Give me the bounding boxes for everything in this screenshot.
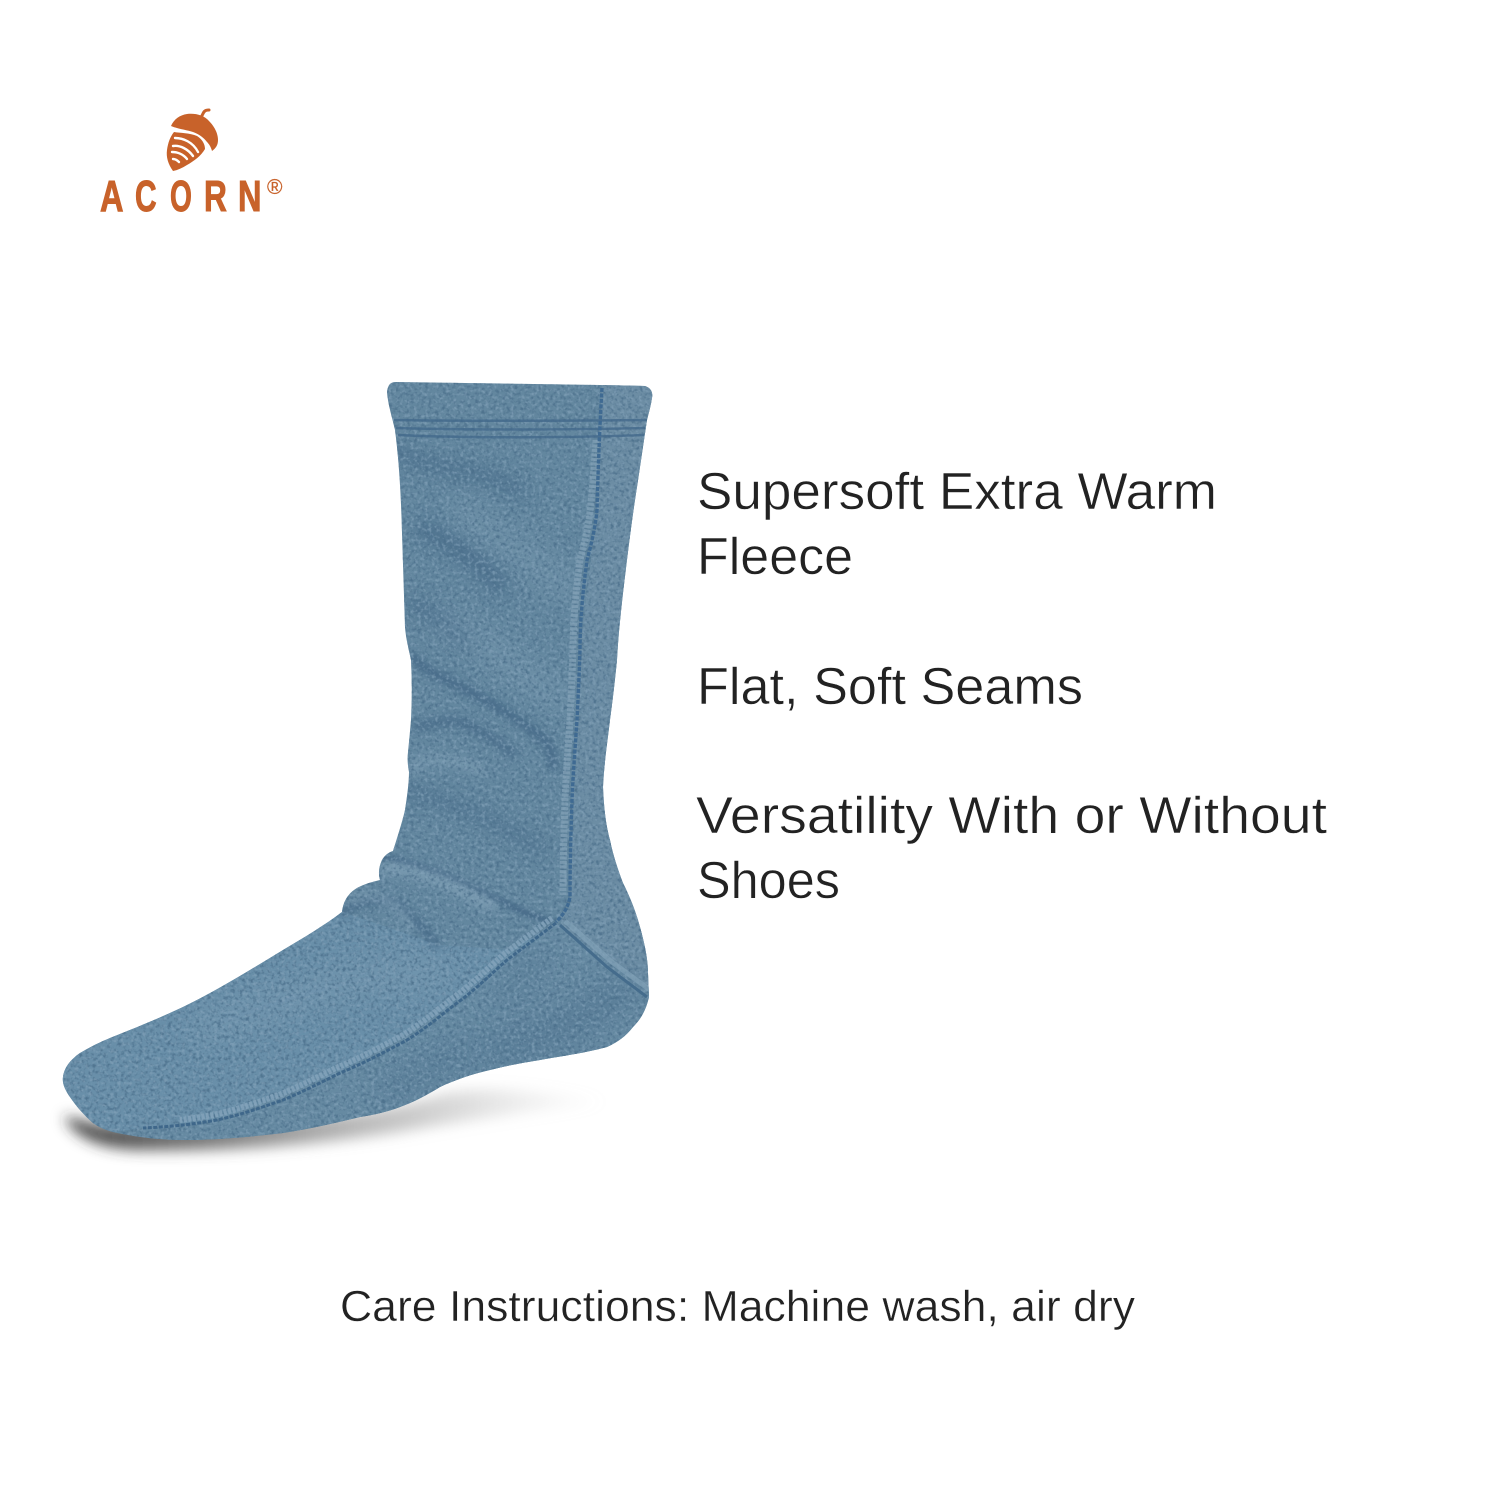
logo wordmark: O <box>170 172 192 221</box>
foot seam <box>180 918 552 1120</box>
feature: fleece <box>697 463 1217 586</box>
icon: acorn <box>167 110 218 171</box>
heel seam <box>560 925 647 997</box>
sock body <box>50 370 670 1160</box>
product photo: blue fleece sock <box>57 382 652 1162</box>
sock foot top <box>50 912 556 1135</box>
feature: seams: Flat, Soft Seams <box>697 658 1083 716</box>
logo wordmark: N <box>238 172 262 221</box>
logo wordmark: ® <box>267 176 283 199</box>
shadow under sock <box>64 1090 610 1150</box>
fleece texture <box>50 370 670 1160</box>
cuff stitching <box>394 420 647 437</box>
feature: versatility: Shoes <box>697 852 840 910</box>
feature: versatility <box>696 787 1328 910</box>
sock right panel <box>564 385 652 992</box>
care instructions: Care Instructions: Machine wash, air dry <box>340 1282 1135 1331</box>
sock fold shading <box>342 450 620 1090</box>
sock light highlights <box>348 616 552 928</box>
feature: versatility: Versatility With or Without <box>696 787 1328 845</box>
logo wordmark: A <box>100 172 124 221</box>
sock sole panel <box>147 992 649 1140</box>
feature: fleece: Supersoft Extra Warm <box>697 463 1217 521</box>
logo wordmark <box>100 171 283 221</box>
logo wordmark: R <box>204 172 227 221</box>
logo wordmark: C <box>135 171 157 220</box>
feature: fleece: Fleece <box>697 528 853 586</box>
side seam <box>143 388 650 1128</box>
